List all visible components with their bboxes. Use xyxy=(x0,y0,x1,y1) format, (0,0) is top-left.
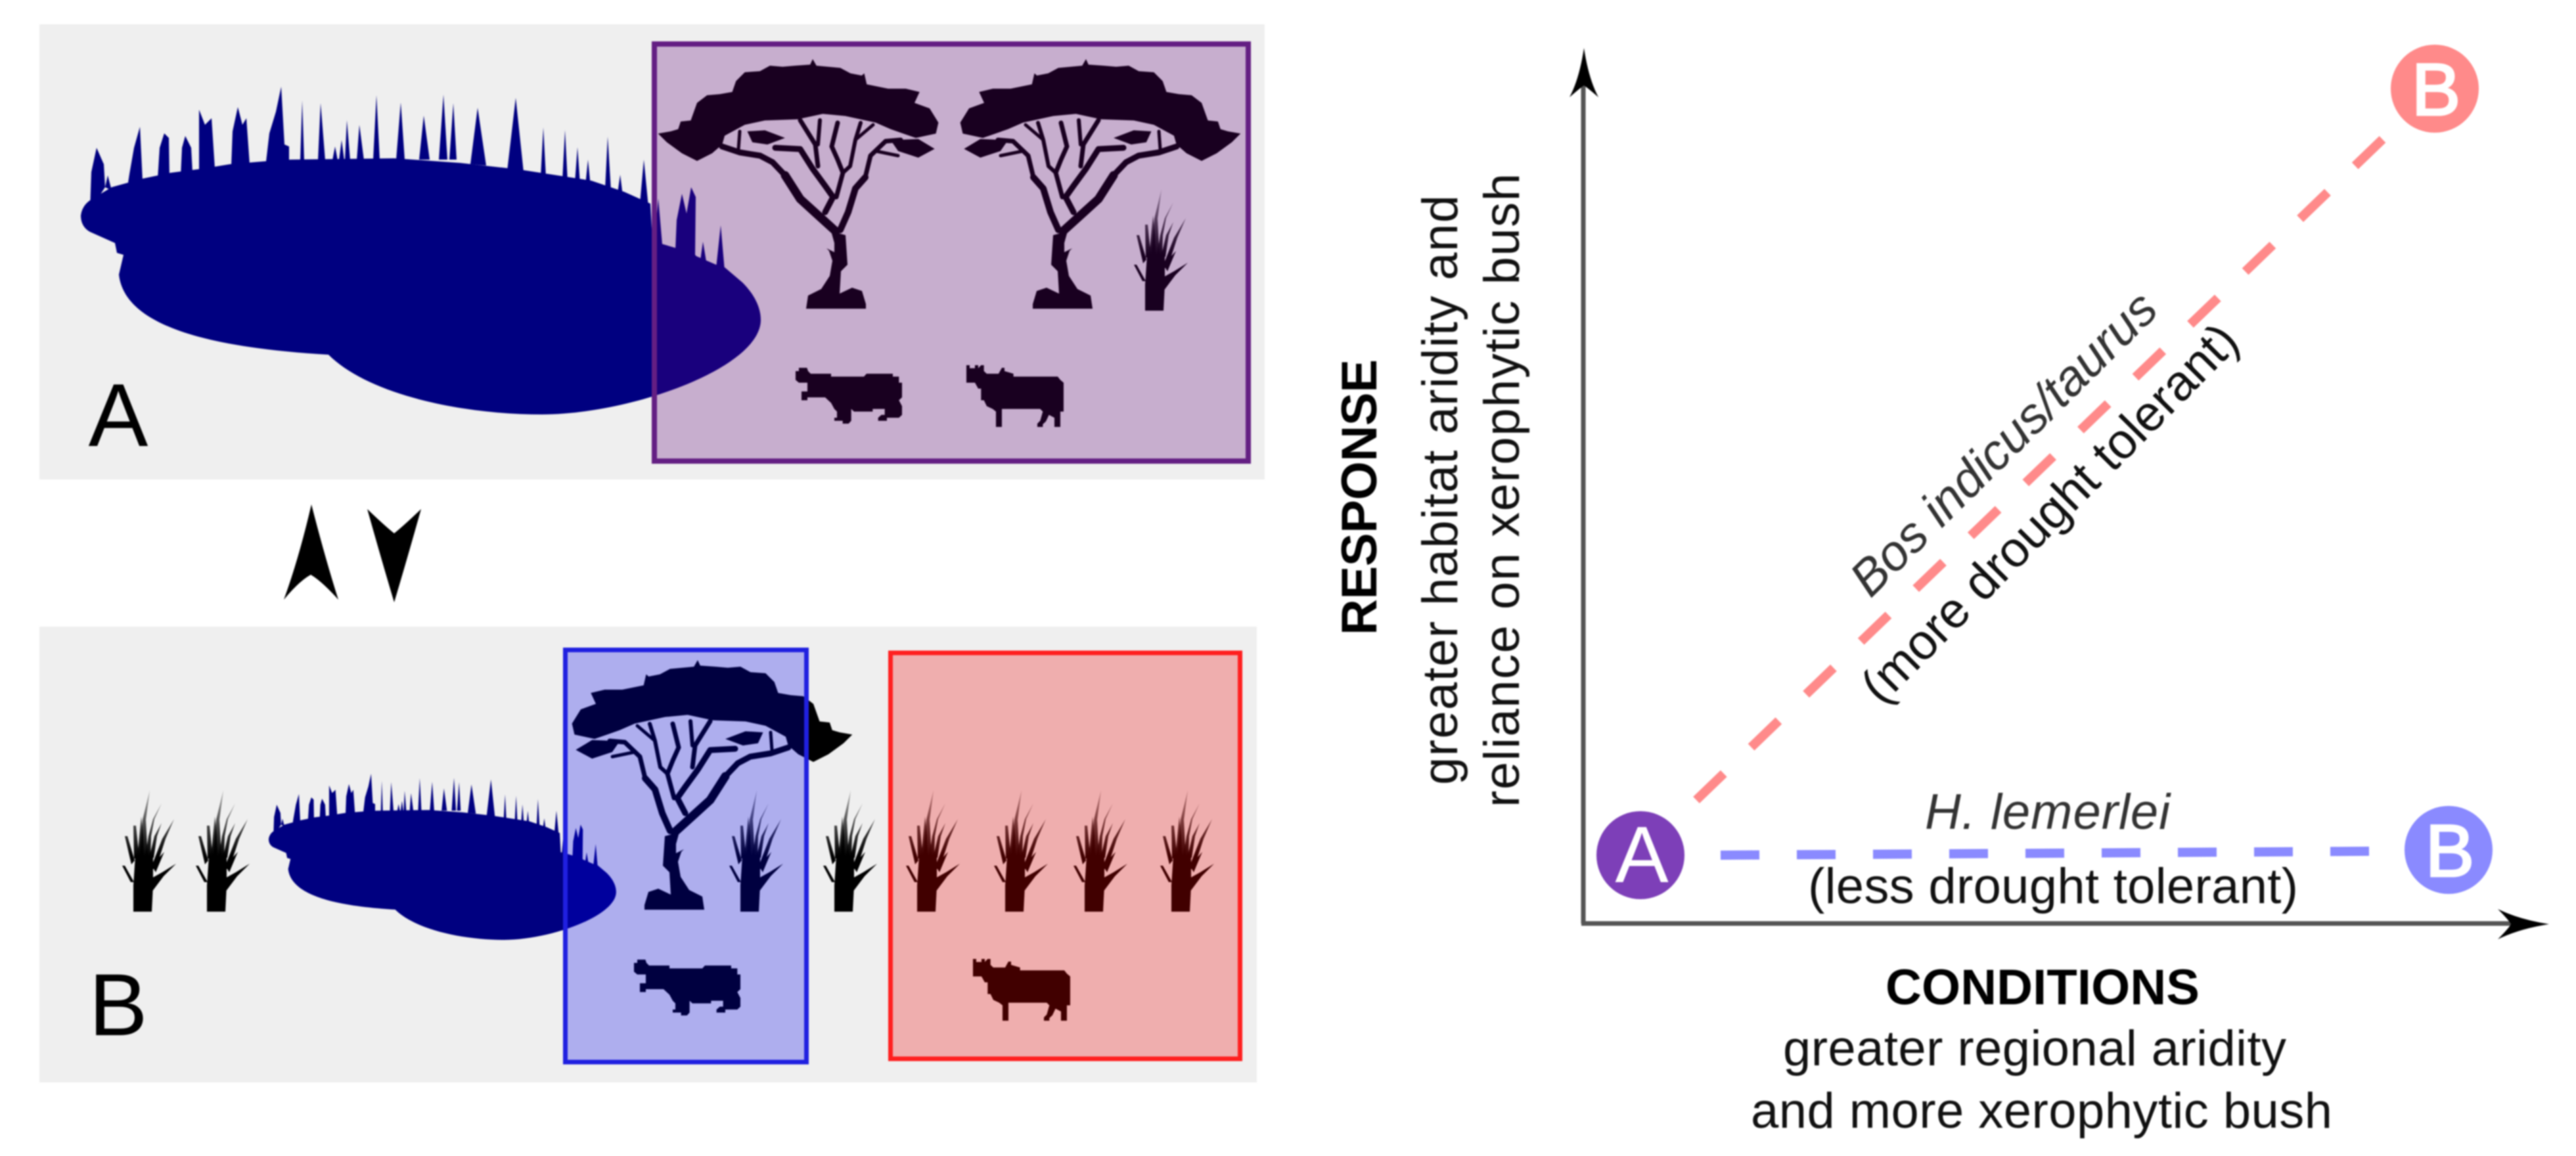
panel: scenario A habitat xyxy=(39,24,1265,479)
point B (H. lemerlei): B xyxy=(2426,810,2474,892)
purple habitat-use box xyxy=(654,44,1248,461)
icon: acacia tree right mirrored xyxy=(960,59,1240,309)
grass tuft 5 xyxy=(906,790,960,912)
grass tuft 7 xyxy=(1073,790,1127,912)
grass tuft 1 xyxy=(122,790,176,912)
label B: B xyxy=(89,956,148,1054)
x axis description line 1: greater regional aridity xyxy=(1783,1021,2286,1077)
arrow: down xyxy=(367,509,421,602)
water and reeds A xyxy=(81,87,761,414)
y axis description line 1: greater habitat aridity and xyxy=(1412,195,1468,785)
icon: hippotragus antelope xyxy=(796,368,902,424)
blue habitat-use box xyxy=(565,650,807,1062)
point B (cattle) xyxy=(2391,45,2479,133)
grass tuft 2 xyxy=(196,790,250,912)
arrow: up xyxy=(284,504,338,600)
label: more drought tolerant: (more drought tolerant) xyxy=(1850,313,2249,714)
dashed line: H. lemerlei xyxy=(1721,851,2372,855)
grass tuft 3 xyxy=(729,790,783,912)
label: less drought tolerant: (less drought tolerant) xyxy=(1808,858,2298,914)
icon: cattle xyxy=(973,959,1070,1021)
x axis description line 2: and more xerophytic bush xyxy=(1751,1083,2332,1139)
panel background A xyxy=(39,24,1265,479)
label A: A xyxy=(89,365,148,465)
point A: A xyxy=(1615,810,1669,899)
point A xyxy=(1596,810,1684,899)
icon: grass tuft xyxy=(1134,189,1188,311)
y axis xyxy=(1570,48,1598,923)
dashed line: Bos indicus/taurus xyxy=(1696,134,2388,800)
point B (cattle): B xyxy=(2412,49,2460,131)
y axis title: RESPONSE xyxy=(1332,359,1388,635)
water and reeds B xyxy=(269,774,616,940)
label: Bos indicus/taurus: Bos indicus/taurus xyxy=(1839,280,2168,607)
chart: response vs conditions xyxy=(1332,45,2549,1139)
icon: acacia tree left xyxy=(658,59,938,309)
grass tuft 6 xyxy=(994,790,1048,912)
panel background B xyxy=(39,627,1257,1082)
point B (H. lemerlei) xyxy=(2405,806,2493,894)
grass tuft 4 xyxy=(823,790,877,912)
x axis xyxy=(1581,909,2549,939)
icon: acacia tree xyxy=(572,660,852,910)
y axis description line 2: reliance on xerophytic bush xyxy=(1474,173,1530,807)
icon: cattle xyxy=(966,365,1064,427)
x axis title: CONDITIONS xyxy=(1886,960,2200,1015)
label: H. lemerlei: H. lemerlei xyxy=(1925,784,2171,840)
grass tuft 8 xyxy=(1160,790,1214,912)
panel: scenario B habitat xyxy=(39,627,1257,1082)
icon: hippotragus antelope xyxy=(634,960,740,1015)
red habitat-use box xyxy=(891,653,1240,1059)
